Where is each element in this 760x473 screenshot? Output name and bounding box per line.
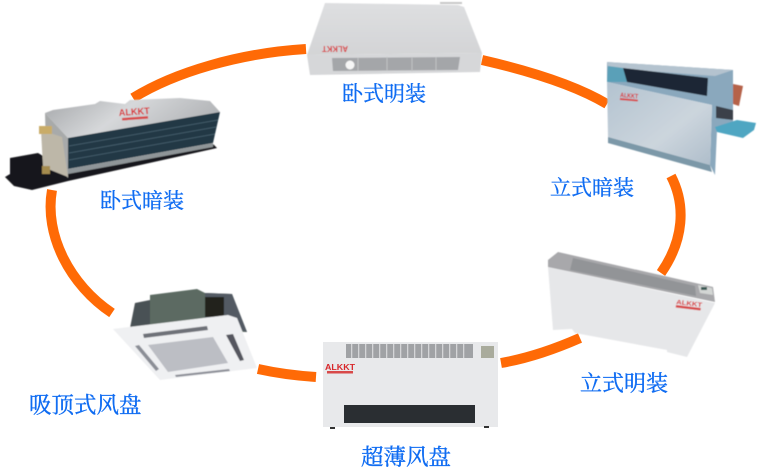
product: vertical exposed unit — [548, 252, 715, 357]
product: horizontal concealed unit — [5, 98, 220, 190]
logo: upside-down brand: ALKKT — [322, 44, 348, 53]
label: 立式明装: 立式明装 — [580, 371, 668, 396]
label: 吸顶式风盘: 吸顶式风盘 — [29, 393, 142, 418]
product: ultra-thin unit — [323, 342, 498, 429]
orange connecting ring — [51, 49, 681, 377]
product: horizontal exposed unit — [307, 2, 482, 75]
logo: brand: ALKKT — [118, 106, 150, 119]
product: ceiling cassette unit — [113, 289, 257, 380]
logo: brand: ALKKT — [620, 92, 638, 101]
label: 卧式明装: 卧式明装 — [342, 82, 426, 106]
logo: brand: ALKKT — [676, 299, 702, 309]
label: 卧式暗装: 卧式暗装 — [100, 189, 184, 213]
label: 立式暗装: 立式暗装 — [550, 176, 634, 200]
product: vertical concealed unit — [607, 62, 756, 175]
label: 超薄风盘: 超薄风盘 — [361, 445, 451, 470]
logo: brand: ALKKT — [325, 362, 356, 372]
